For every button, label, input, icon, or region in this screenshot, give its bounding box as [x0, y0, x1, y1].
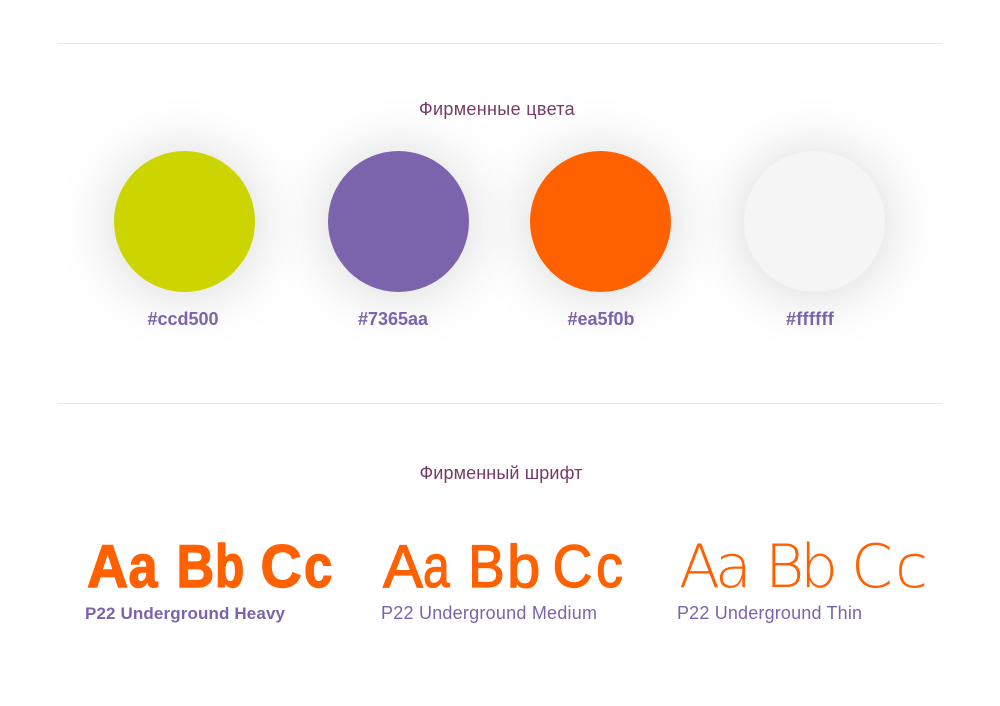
- specimen: heavy: P22 Underground Heavy: [85, 604, 286, 623]
- label: lime hex: #ccd500: [147, 309, 219, 329]
- label: purple hex: #7365aa: [358, 309, 428, 329]
- specimen: medium: b: [507, 533, 540, 600]
- specimen: heavy: A: [87, 534, 128, 600]
- font specimens: [0, 532, 928, 623]
- specimen: heavy: B: [176, 533, 214, 600]
- label: white hex: #ffffff: [786, 309, 834, 329]
- specimen: heavy: [85, 533, 332, 623]
- specimen: medium: [381, 533, 623, 623]
- colour swatch: white: [744, 151, 885, 292]
- specimen: medium: c: [596, 533, 623, 601]
- specimen: heavy: a: [128, 533, 158, 600]
- specimen: heavy: C: [260, 534, 302, 600]
- specimen: medium: a: [423, 533, 450, 600]
- specimen: medium: A: [383, 533, 423, 600]
- heading: brand colours: Фирменные цвета: [419, 99, 575, 119]
- label: orange hex: #ea5f0b: [567, 309, 635, 329]
- specimen: medium: P22 Underground Medium: [381, 603, 597, 623]
- specimen: medium: B: [468, 534, 505, 601]
- colour swatch: purple: [328, 151, 469, 292]
- specimen: thin: Aa Bb Cc: [0, 532, 928, 602]
- heading: brand font: Фирменный шрифт: [420, 463, 582, 483]
- specimen: heavy: c: [304, 533, 332, 600]
- colour swatch: orange: [530, 151, 671, 292]
- specimen: thin: P22 Underground Thin: [677, 603, 862, 623]
- colour swatch: lime: [114, 151, 255, 292]
- specimen: medium: C: [552, 534, 592, 601]
- specimen: heavy: b: [215, 533, 244, 600]
